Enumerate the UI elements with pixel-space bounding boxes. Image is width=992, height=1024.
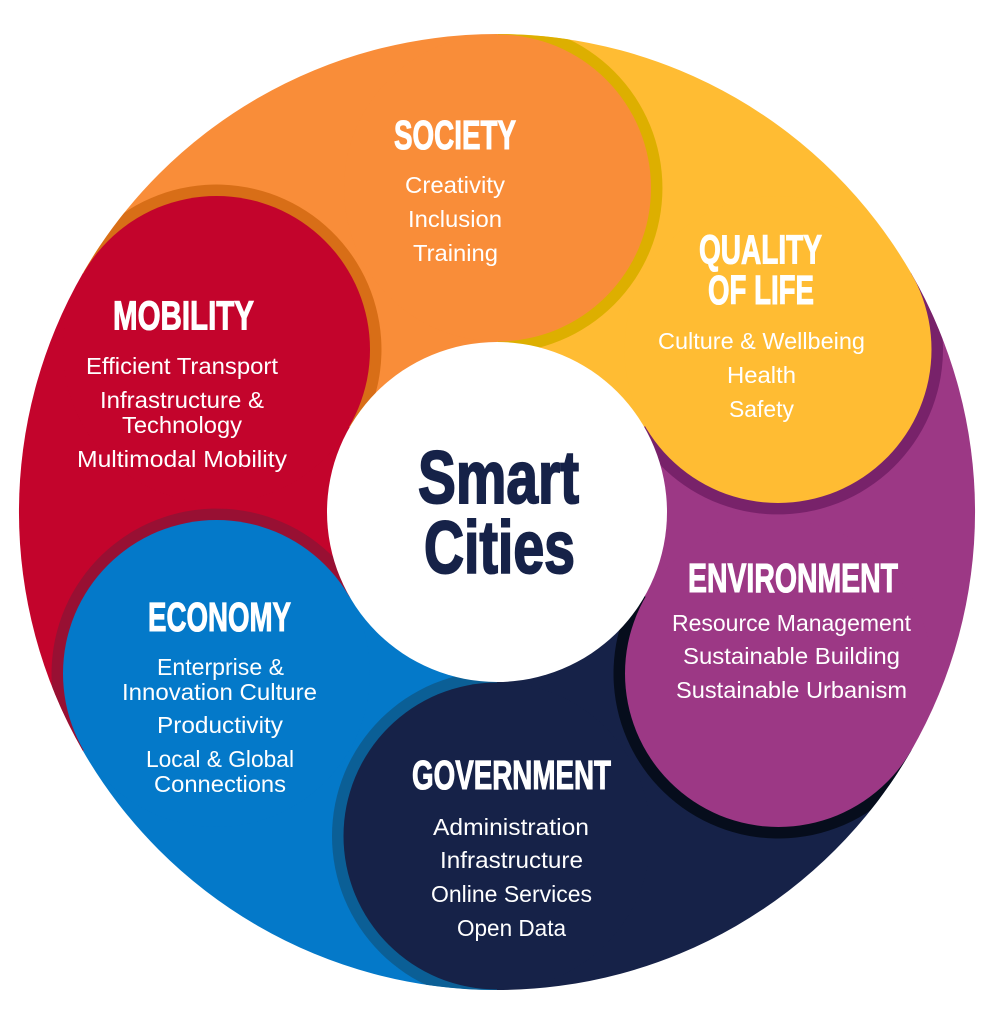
panel: quality of life bbox=[644, 234, 943, 514]
panel: government: GOVERNMENT bbox=[412, 752, 611, 798]
panel: government bbox=[332, 676, 612, 990]
panel: mobility bbox=[79, 184, 382, 472]
panel: quality of life: OF LIFE bbox=[708, 267, 814, 313]
panel: environment: Resource Management bbox=[672, 610, 912, 636]
panel: mobility: Efficient Transport bbox=[86, 353, 279, 379]
panel: mobility: Infrastructure & bbox=[100, 387, 264, 413]
panel: economy: Enterprise & bbox=[157, 654, 284, 680]
panel: quality of life: QUALITY bbox=[699, 226, 822, 272]
panel: environment bbox=[614, 563, 917, 838]
panel: environment: ENVIRONMENT bbox=[688, 555, 898, 601]
panel: society: Training bbox=[413, 240, 498, 266]
panel: society bbox=[394, 34, 662, 348]
panel: economy: Connections bbox=[154, 771, 286, 797]
panel: mobility: Multimodal Mobility bbox=[77, 446, 288, 472]
panel: mobility: Technology bbox=[122, 412, 243, 438]
panel: economy: Local & Global bbox=[146, 746, 294, 772]
panel: government: Online Services bbox=[431, 881, 592, 907]
panel: quality of life: Culture & Wellbeing bbox=[658, 328, 865, 354]
center hub: Smart Cities: Smart bbox=[418, 436, 579, 519]
panel: mobility: MOBILITY bbox=[113, 292, 254, 338]
panel: economy: Innovation Culture bbox=[122, 679, 317, 705]
panel: government: Open Data bbox=[457, 915, 566, 941]
panel: quality of life: Health bbox=[727, 362, 796, 388]
panel: economy bbox=[52, 508, 350, 792]
panel: society: SOCIETY bbox=[394, 112, 516, 158]
panel: society: Inclusion bbox=[408, 206, 502, 232]
panel: environment: Sustainable Building bbox=[683, 643, 900, 669]
panel: government: Infrastructure bbox=[440, 847, 583, 873]
panel: quality of life: Safety bbox=[729, 396, 794, 422]
center hub: Smart Cities bbox=[327, 342, 667, 682]
panel: environment: Sustainable Urbanism bbox=[676, 677, 907, 703]
panel: economy: ECONOMY bbox=[148, 594, 291, 640]
panel: economy: Productivity bbox=[157, 712, 284, 738]
center hub: Smart Cities: Cities bbox=[424, 506, 575, 589]
panel: government: Administration bbox=[433, 814, 589, 840]
panel: society: Creativity bbox=[405, 172, 506, 198]
